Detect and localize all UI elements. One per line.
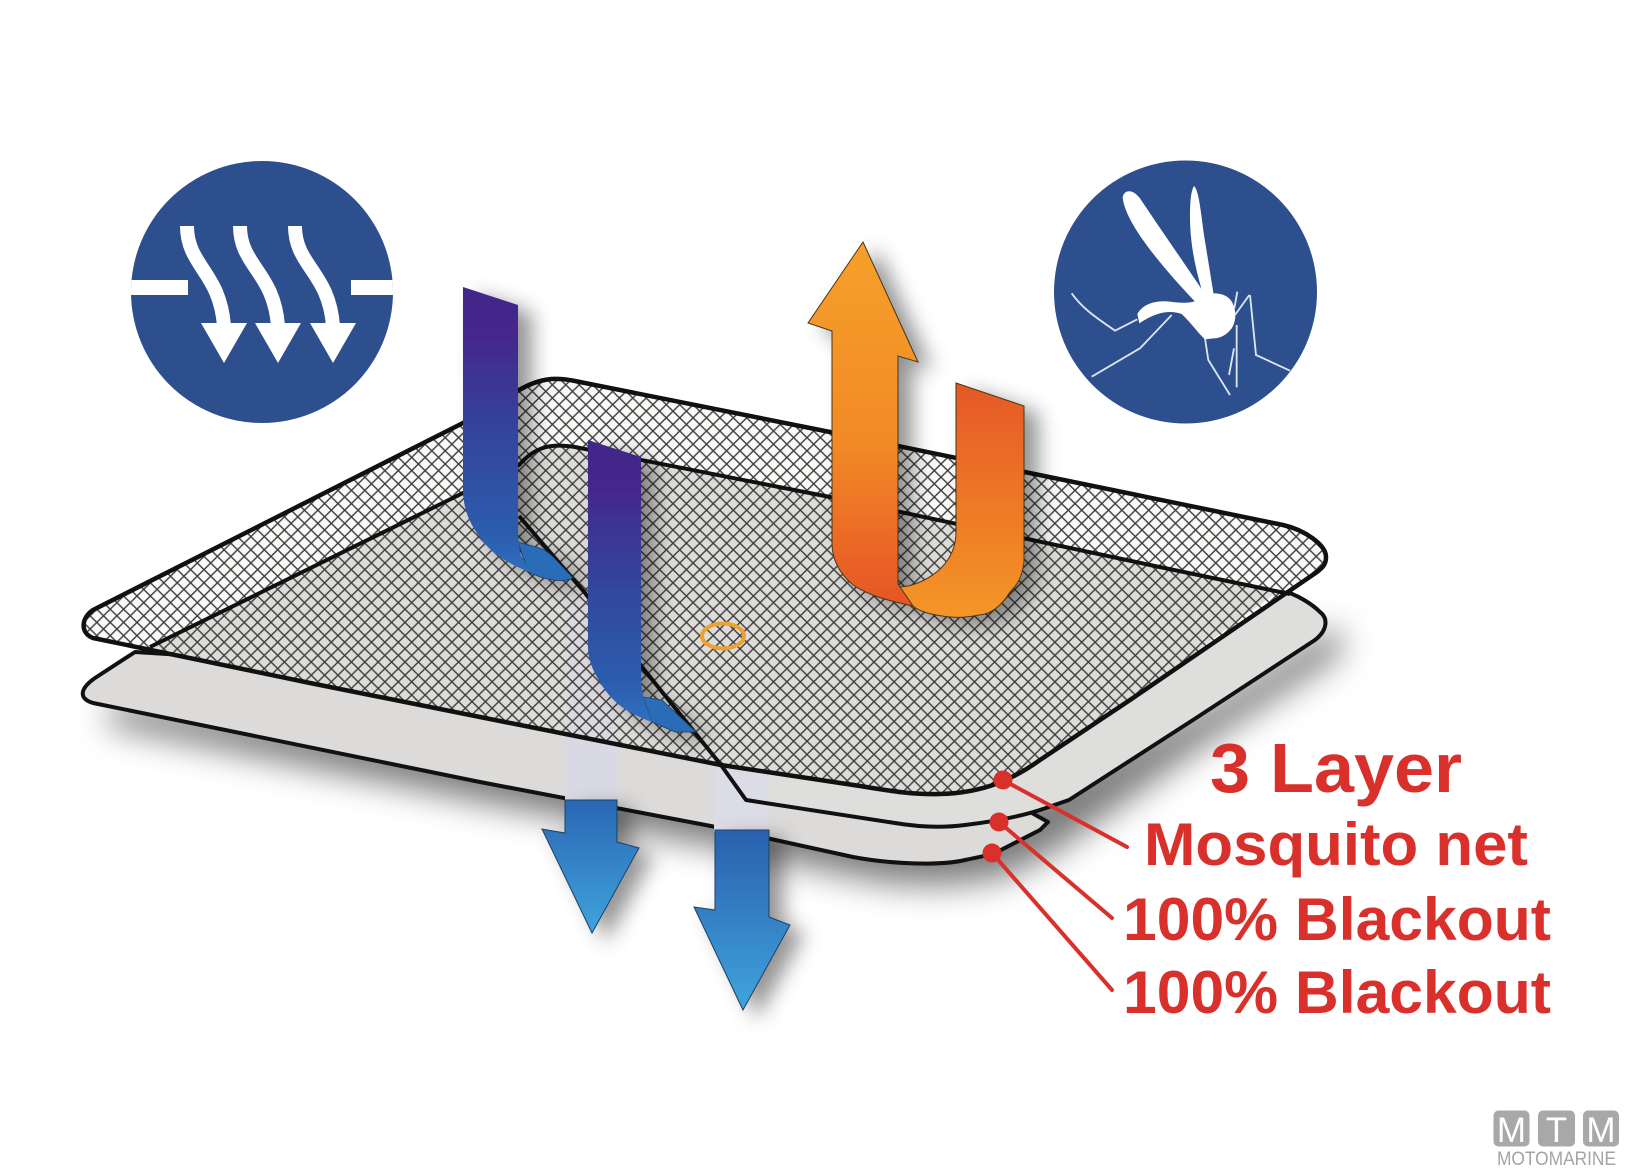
icon: mosquito [1054, 160, 1317, 424]
logo: MTM Motomarine [1494, 1110, 1619, 1170]
logo: MTM Motomarine: T [1546, 1111, 1567, 1150]
logo: MTM Motomarine: M [1497, 1111, 1526, 1150]
arrow: air down right [694, 830, 790, 1010]
arrow: orange heat rising [808, 242, 1024, 617]
shadow under fabric layers [107, 627, 1342, 885]
arrow: right blue ribbon into net [588, 440, 696, 732]
label: 100% Blackout upper: 100% Blackout [1123, 886, 1551, 953]
red leader lines and dots [982, 770, 1127, 990]
leader: first blackout [990, 812, 1112, 918]
label: Mosquito net: Mosquito net [1144, 811, 1528, 878]
edge of upper blackout layer [721, 593, 1325, 827]
icon: heat passing through barrier [131, 161, 394, 423]
label: 100% Blackout lower: 100% Blackout [1123, 959, 1551, 1026]
small orange ring marker [702, 624, 744, 648]
arrow: air down left [542, 800, 639, 933]
layer: mosquito net [84, 379, 1326, 794]
leader: second blackout [982, 844, 1112, 990]
logo: MTM Motomarine: MOTOMARINE [1497, 1149, 1616, 1170]
layer: lower 100% blackout [83, 652, 1048, 864]
leader: mosquito net [994, 770, 1127, 847]
faint airflow columns through blackout layers [565, 733, 768, 832]
layer: upper 100% blackout [721, 592, 1325, 827]
label: 3 Layer: 3 Layer [1210, 729, 1462, 807]
logo: MTM Motomarine: M [1586, 1111, 1616, 1150]
arrow: left blue ribbon into net [463, 287, 573, 581]
